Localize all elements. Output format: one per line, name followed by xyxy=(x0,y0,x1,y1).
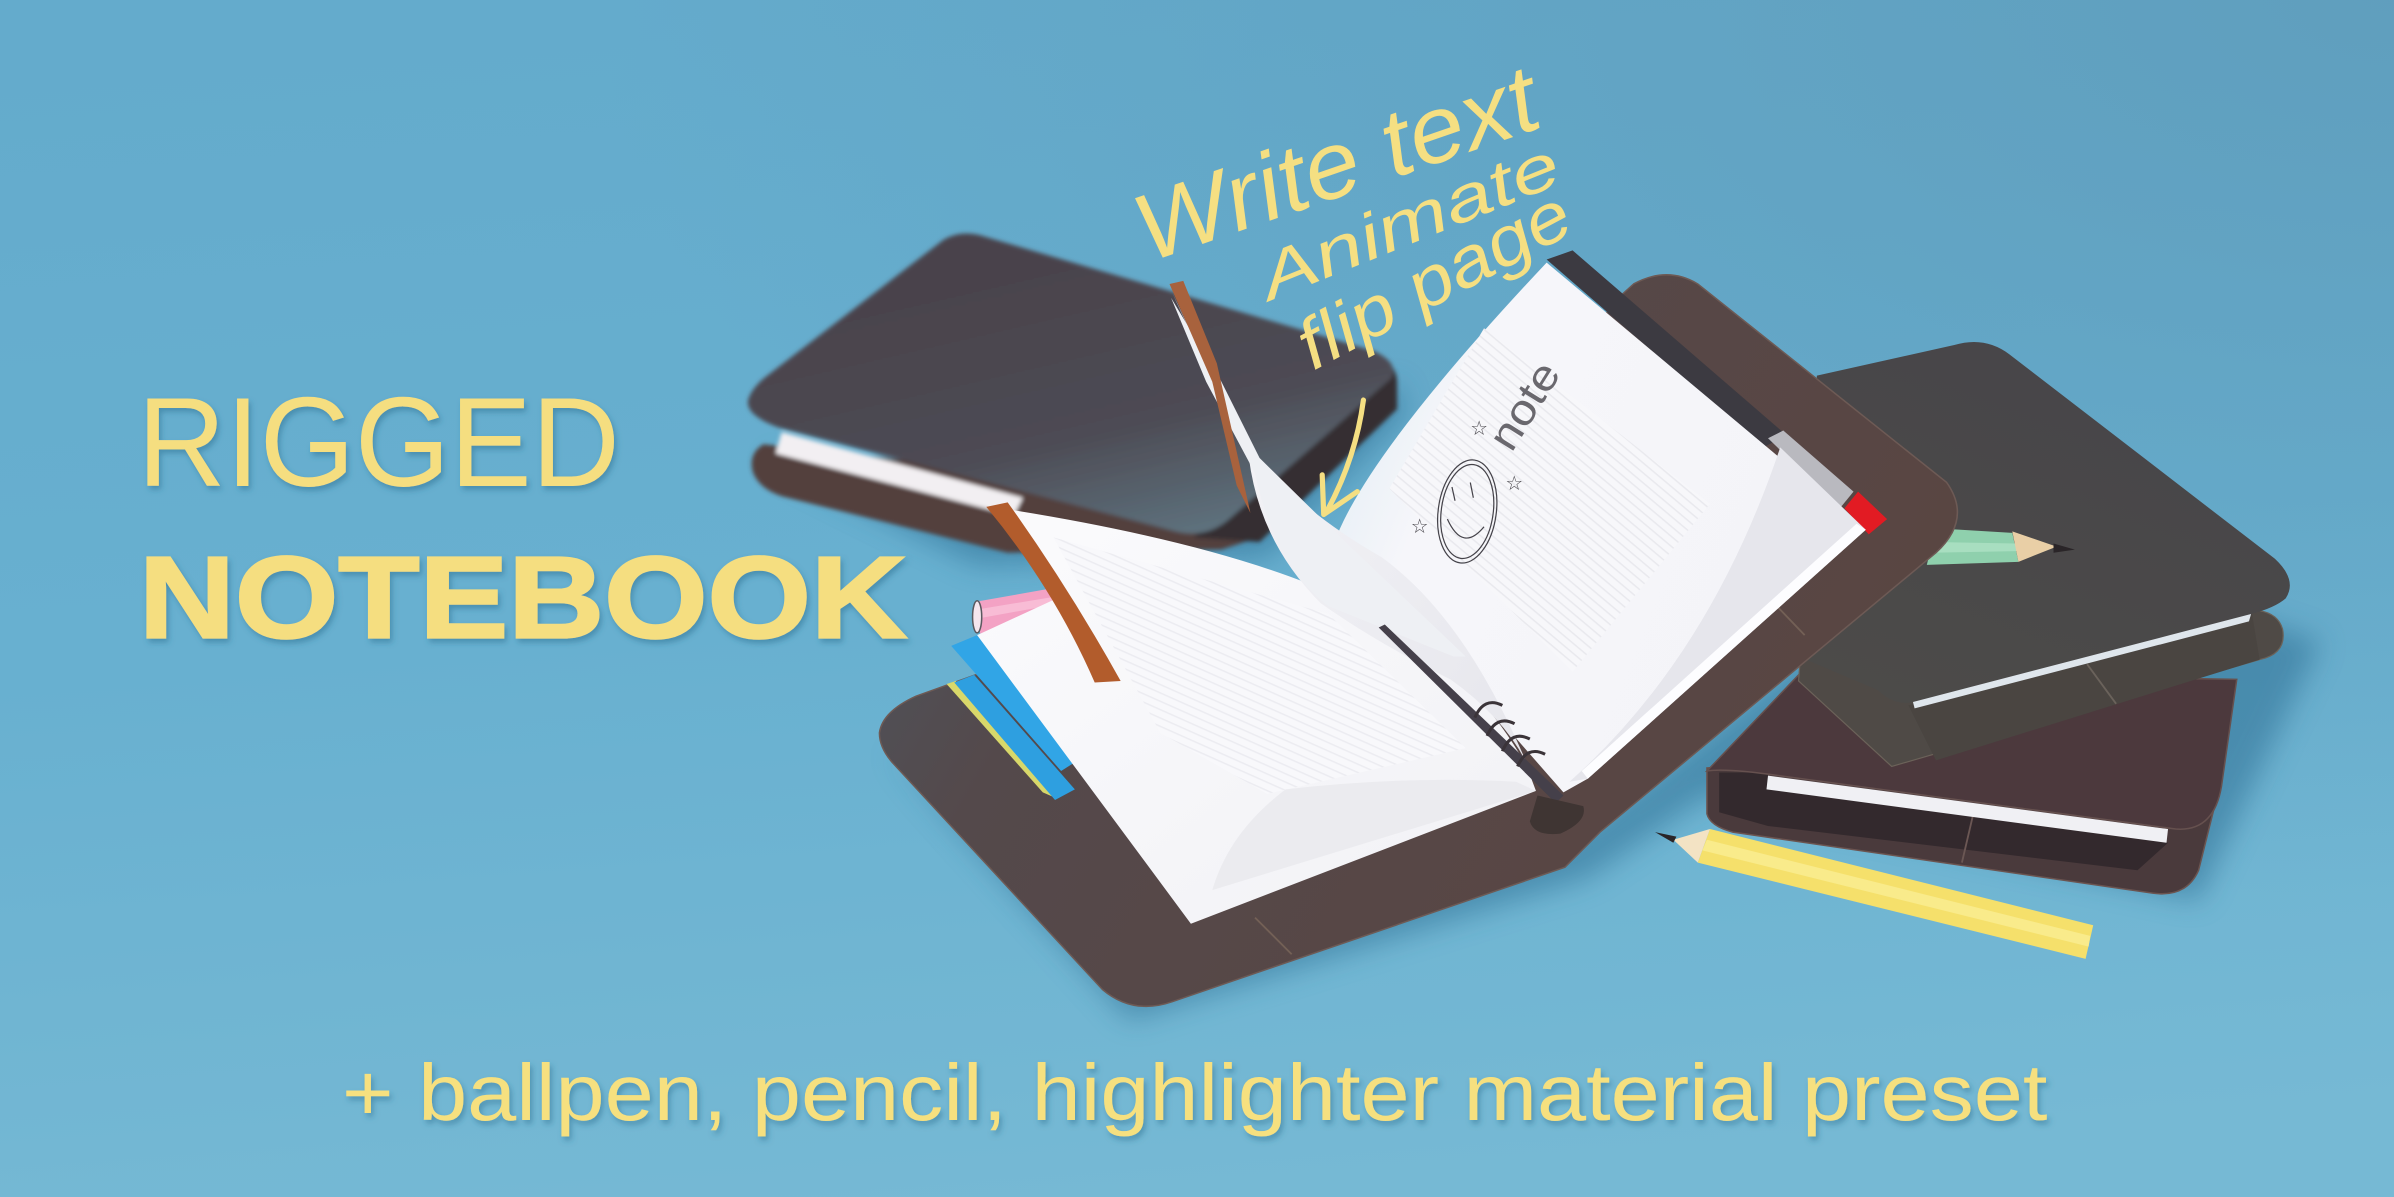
right page block xyxy=(1337,263,1866,792)
pencil end xyxy=(973,601,982,633)
upper flipping page body xyxy=(1171,298,1466,657)
cover xyxy=(879,275,1957,1006)
top-right notebook xyxy=(1799,342,2290,766)
curled page shadow xyxy=(1212,780,1536,890)
right page ruled lines xyxy=(1389,328,1710,672)
ribbon: flipping bookmark xyxy=(1170,281,1250,513)
top cover xyxy=(1707,672,2237,829)
page doodle: smiley xyxy=(1431,456,1503,567)
top cover xyxy=(1799,342,2290,703)
binder clasp xyxy=(1530,795,1584,834)
left page ruled lines xyxy=(1053,537,1466,794)
lower cover xyxy=(1707,748,2214,894)
left page block xyxy=(977,507,1536,924)
ribbon: left bookmark xyxy=(986,502,1121,682)
handwritten callout xyxy=(1120,44,1584,384)
dark index tab top xyxy=(1547,250,1786,447)
spine inner xyxy=(1908,614,2260,760)
blue index tabs xyxy=(954,675,1075,800)
page doodle: note text: note xyxy=(1479,353,1570,459)
stitched seam xyxy=(1962,817,1973,863)
subtitle: + ballpen, pencil, highlighter material preset xyxy=(342,1048,2047,1137)
flipping page xyxy=(1173,293,1527,763)
handwriting: Animate: Animate xyxy=(1244,128,1570,316)
yellow index tab xyxy=(947,681,1053,797)
binder spine xyxy=(1379,624,1563,803)
spine xyxy=(1194,354,1397,542)
grey index tab xyxy=(1768,431,1854,508)
title xyxy=(137,371,907,662)
page edge highlight xyxy=(1582,524,1866,779)
title line 2: NOTEBOOK xyxy=(139,532,907,662)
arrow to flipping page xyxy=(1322,400,1363,515)
pencil wood tip xyxy=(2012,531,2057,562)
page doodle: star: ☆ xyxy=(1505,472,1523,495)
top cover xyxy=(748,233,1393,533)
binder rings xyxy=(1475,703,1545,766)
pink pencil xyxy=(973,585,1072,634)
yellow pencil xyxy=(1655,829,2093,959)
title line 1: RIGGED xyxy=(137,371,620,513)
stitched seams xyxy=(1255,600,1805,954)
page block xyxy=(1766,776,2168,843)
right page curl shade xyxy=(1570,447,1866,782)
page edge xyxy=(1912,611,2252,708)
handwriting: Write text: Write text xyxy=(1120,44,1556,282)
back-left notebook (blurred) xyxy=(748,233,1397,553)
pencil wood tip xyxy=(1673,829,1710,863)
main open notebook xyxy=(879,250,1957,1006)
lower cover xyxy=(752,444,1267,553)
lower cover xyxy=(1799,611,2283,766)
ground shadows xyxy=(763,382,2321,1020)
red index tab xyxy=(1844,492,1887,534)
inner opening xyxy=(1719,773,2168,870)
page doodle: star: ☆ xyxy=(1470,417,1488,440)
page block xyxy=(776,432,1023,516)
bottom-right notebook xyxy=(1707,672,2237,894)
seam xyxy=(2087,664,2116,704)
page doodle: star: ☆ xyxy=(1411,515,1429,538)
handwriting: flip page: flip page xyxy=(1283,174,1584,384)
green pencil xyxy=(1927,528,2075,565)
